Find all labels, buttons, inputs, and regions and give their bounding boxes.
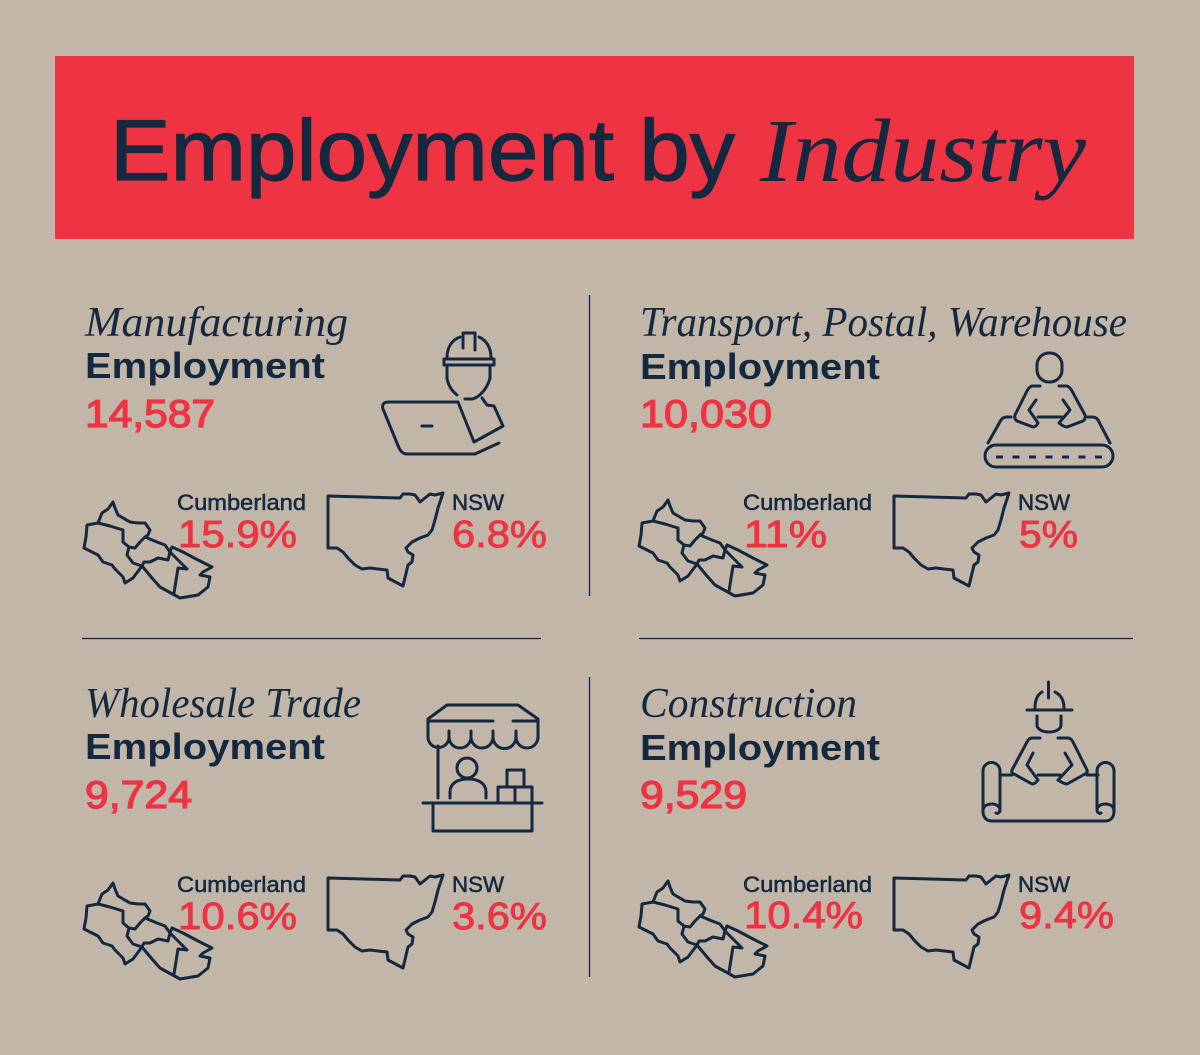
label: Employment: Employment: [85, 345, 325, 386]
icon: worker with blueprint: [983, 682, 1114, 821]
label: Employment: Employment: [85, 726, 325, 767]
heading: Transport, Postal, Warehouse: Transport, Postal, Warehouse: [640, 300, 1127, 346]
value: Cumberland share: 15.9%: [178, 514, 297, 556]
number: 9,724: 9,724: [85, 774, 192, 817]
value: NSW share: 9.4%: [1019, 895, 1114, 937]
heading: Wholesale Trade: Wholesale Trade: [85, 681, 361, 727]
label: Cumberland: Cumberland: [177, 490, 306, 515]
panel: construction: [639, 681, 1114, 977]
heading: Manufacturing: Manufacturing: [84, 300, 348, 346]
label: Employment: Employment: [640, 727, 880, 768]
number: 9,529: 9,529: [640, 774, 747, 817]
heading: Construction: Construction: [640, 681, 857, 727]
label: Cumberland: Cumberland: [743, 490, 872, 515]
label: Employment: Employment: [640, 346, 880, 387]
icon: market stall: [423, 705, 542, 831]
icon: Cumberland map: [639, 500, 767, 596]
label: NSW: NSW: [452, 872, 504, 897]
label: NSW: NSW: [452, 490, 504, 515]
label: NSW: NSW: [1018, 490, 1070, 515]
number: 14,587: 14,587: [85, 393, 215, 436]
label: Cumberland: Cumberland: [743, 872, 872, 897]
icon: NSW map: [894, 875, 1009, 968]
label: NSW: NSW: [1018, 872, 1070, 897]
panel: manufacturing: [84, 300, 547, 598]
icon: Cumberland map: [84, 883, 212, 979]
label: Cumberland: Cumberland: [177, 872, 306, 897]
number: 10,030: 10,030: [640, 393, 772, 436]
icon: worker at conveyor belt: [985, 353, 1113, 467]
icon: NSW map: [894, 493, 1009, 586]
value: Cumberland share: 10.6%: [178, 896, 297, 938]
value: NSW share: 6.8%: [452, 514, 547, 556]
icon: worker with laptop: [383, 333, 503, 454]
value: NSW share: 3.6%: [452, 896, 547, 938]
panel: transport, postal, warehouse: [639, 300, 1127, 596]
title: Employment by: Employment by: [110, 103, 735, 199]
icon: Cumberland map: [639, 881, 767, 977]
title banner: [55, 56, 1134, 239]
value: Cumberland share: 11%: [744, 514, 827, 556]
title: Industry: Industry: [759, 102, 1086, 201]
icon: Cumberland map: [84, 502, 212, 598]
icon: NSW map: [328, 875, 443, 968]
value: Cumberland share: 10.4%: [744, 895, 863, 937]
panel: wholesale trade: [84, 681, 547, 979]
icon: NSW map: [328, 493, 443, 586]
value: NSW share: 5%: [1019, 514, 1078, 556]
